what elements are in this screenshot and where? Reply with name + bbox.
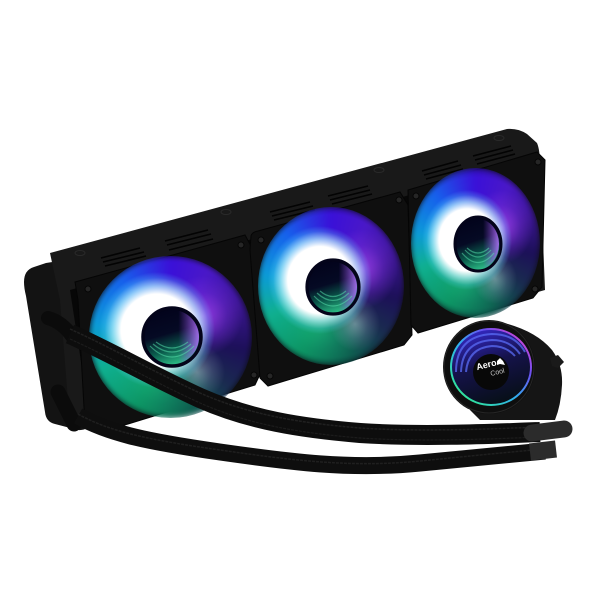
rail screws: [75, 136, 504, 256]
upper tube: [70, 329, 564, 440]
pump body: [470, 322, 562, 420]
pump front cap: [443, 320, 535, 414]
logo leaf icon: [497, 358, 505, 365]
fan frame 1: [75, 235, 262, 432]
pump mount tab: [550, 355, 564, 368]
upper tube connector: [48, 318, 72, 336]
lower tube: [78, 414, 556, 466]
logo: Cool: [490, 368, 506, 378]
fan 1 hub: [143, 308, 201, 366]
fan frame 3: [408, 152, 545, 333]
radiator top rail: [50, 129, 545, 425]
vents: [101, 146, 515, 266]
fan 2 lighting: [258, 207, 404, 365]
fan 2 hub: [307, 260, 359, 314]
logo: Aero: [475, 357, 498, 372]
fan 3 hub: [455, 217, 501, 271]
pump hub: [473, 354, 509, 390]
logo: [475, 356, 506, 381]
radiator end tank: [24, 258, 95, 430]
fan frame 2: [250, 192, 412, 386]
pump block: [443, 320, 564, 420]
frame corner screws: [85, 159, 541, 379]
lower tube connector: [58, 392, 74, 424]
fan 1 lighting: [89, 256, 252, 418]
fan 3 lighting: [411, 168, 540, 318]
infinity ring: [451, 329, 531, 405]
